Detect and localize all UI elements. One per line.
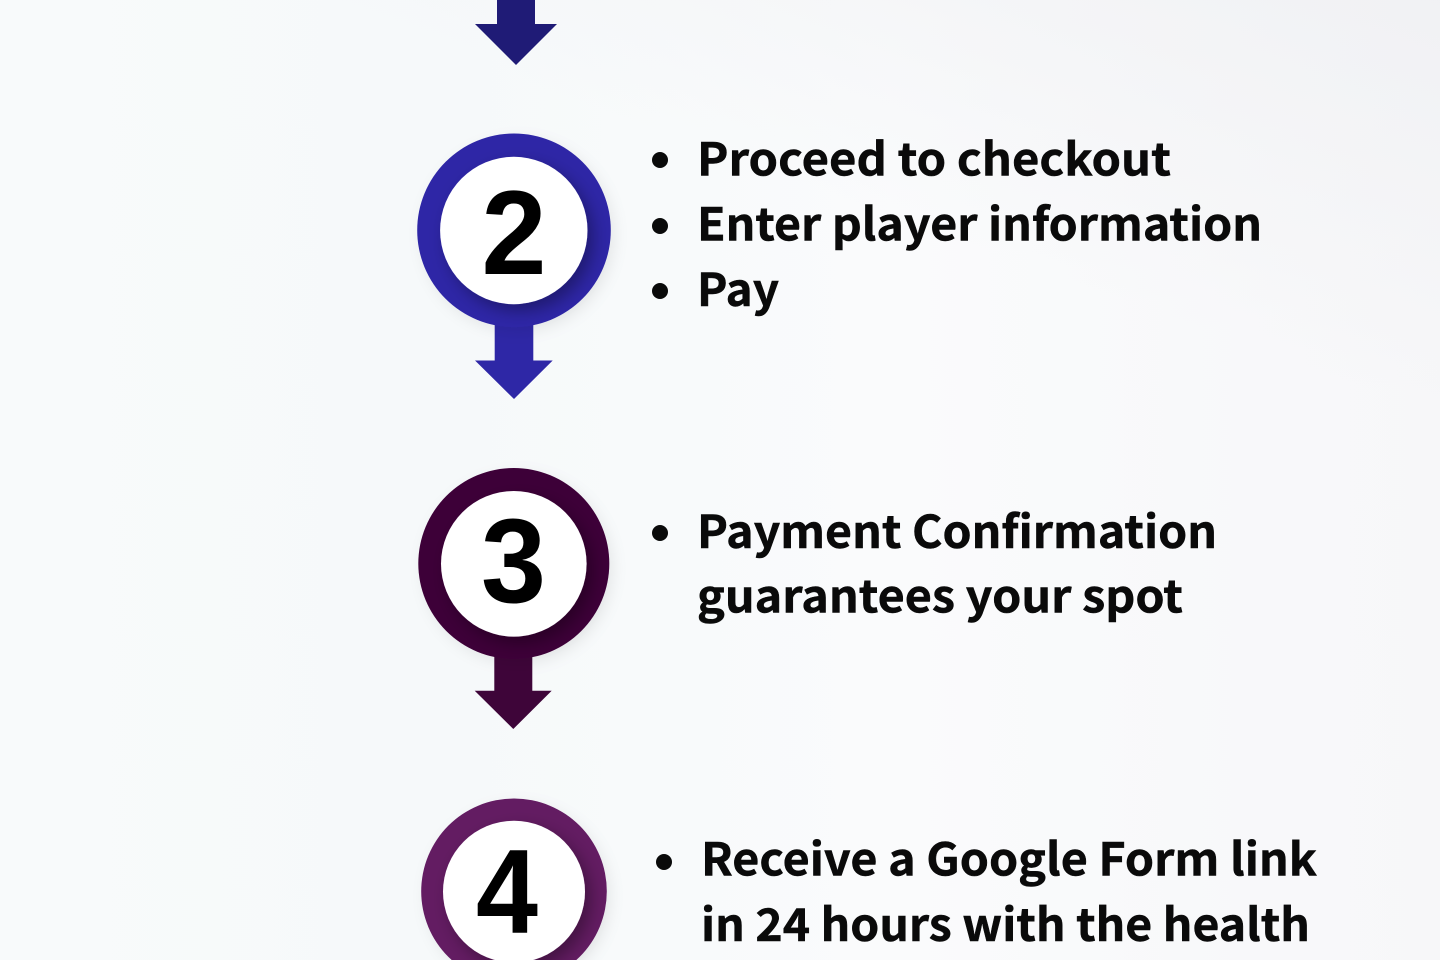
step 4 marker [421, 798, 607, 960]
arrow: step 3 [475, 650, 552, 729]
step 3 text [652, 496, 1217, 626]
disc: step 3 [441, 491, 587, 637]
number 4: 4 [476, 825, 538, 959]
step 2 text: Pay [697, 254, 779, 319]
disc: step 2 [440, 157, 588, 304]
number 2: 2 [482, 166, 546, 300]
arrow: step 1 [475, 0, 557, 65]
ring: step 2 [417, 134, 611, 327]
arrow: step 2 [475, 320, 553, 399]
step 4 text [656, 824, 1317, 954]
step 2 marker [417, 134, 611, 399]
step 2 text: Enter player information [697, 188, 1262, 254]
number 3: 3 [481, 494, 546, 628]
step 4 text: Receive a Google Form link [701, 824, 1317, 888]
step 4 text: in 24 hours with the health [701, 889, 1310, 954]
ring: step 4 [421, 798, 607, 960]
disc: step 4 [443, 821, 585, 960]
step 3 marker [418, 468, 609, 729]
step 3 text: Payment Confirmation [697, 496, 1217, 561]
step 2 text: Proceed to checkout [697, 124, 1171, 188]
step 2 text [652, 124, 1262, 319]
ring: step 3 [418, 468, 609, 659]
step 3 text: guarantees your spot [697, 560, 1183, 626]
